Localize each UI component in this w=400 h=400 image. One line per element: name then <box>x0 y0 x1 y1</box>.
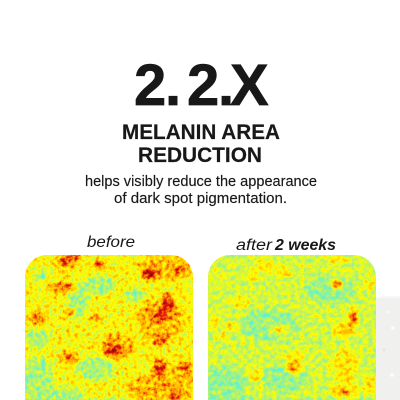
label: after 2 weeks: 2 weeks <box>274 237 336 254</box>
description text <box>85 173 317 207</box>
label: after 2 weeks <box>236 237 336 254</box>
heading: melanin area reduction: MELANIN AREA <box>122 120 280 144</box>
description text: of dark spot pigmentation. <box>114 190 287 207</box>
cream swatch at right edge <box>370 297 400 400</box>
heatmap: before <box>25 255 193 400</box>
title: 2.2X: 2.2.X <box>134 53 269 118</box>
description text: helps visibly reduce the appearance <box>85 173 317 190</box>
label: before: before <box>87 234 135 251</box>
heading: melanin area reduction <box>122 120 280 167</box>
heading: melanin area reduction: REDUCTION <box>138 143 262 167</box>
label: after 2 weeks: after <box>236 237 273 254</box>
heatmap: after 2 weeks <box>208 255 376 400</box>
